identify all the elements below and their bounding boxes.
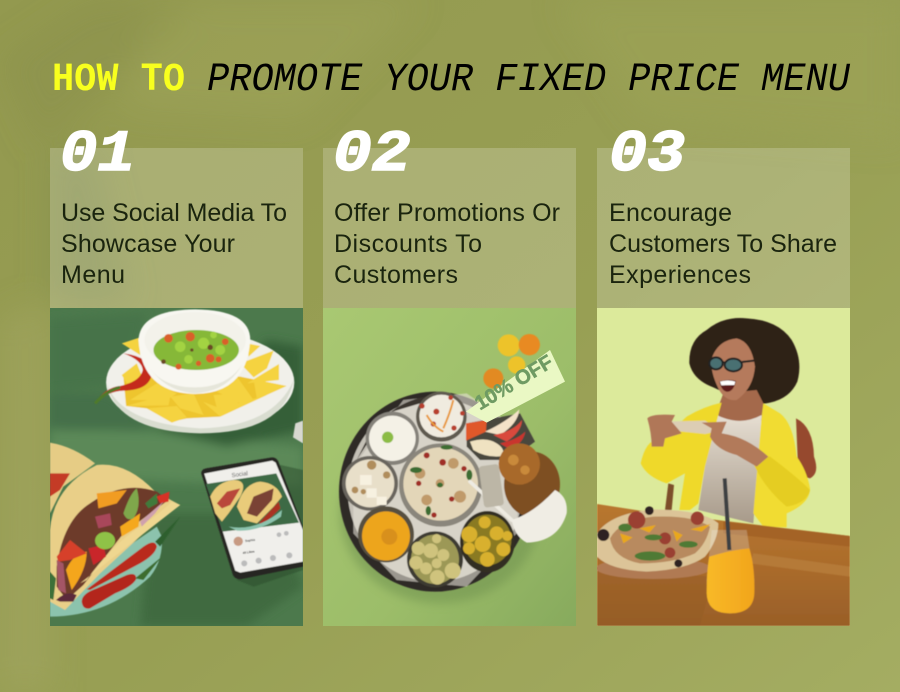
panel: step 3 — [596, 122, 850, 626]
photo: woman photographing pizza — [597, 308, 850, 626]
napkin — [293, 421, 303, 443]
photo: tacos, chips and phone on green table — [50, 308, 303, 626]
panel: step 2 — [323, 122, 576, 626]
bowl — [138, 309, 250, 394]
sago bowl — [416, 392, 467, 442]
glasses — [709, 357, 742, 371]
teal plate — [50, 527, 162, 617]
title: HOW TO PROMOTE YOUR FIXED PRICE MENU — [52, 57, 851, 102]
front taco — [50, 465, 180, 610]
hands — [647, 415, 682, 447]
shirt — [698, 415, 762, 523]
table — [597, 504, 850, 626]
hair — [689, 318, 799, 404]
photo: tacos, chips and phone on green table: 45 Likes — [243, 549, 255, 555]
steel thali — [339, 392, 531, 592]
halwa bowl — [358, 506, 414, 562]
back taco — [50, 443, 95, 513]
red peppers — [87, 542, 157, 590]
sweet — [479, 464, 504, 508]
marigold flowers — [498, 334, 520, 356]
fruit bowl — [467, 413, 535, 460]
phone — [663, 421, 722, 434]
jackfruit bowl — [460, 511, 515, 572]
text: use social media: Menu — [61, 261, 125, 289]
straw — [725, 478, 729, 550]
phone — [237, 465, 303, 587]
chili — [95, 353, 152, 403]
face — [711, 338, 755, 400]
neck and chest — [718, 390, 765, 425]
pizza — [596, 558, 711, 579]
discount tag: 10% OFF — [471, 351, 557, 415]
text: use social media: Showcase Your — [61, 230, 235, 258]
card background 3 — [597, 148, 850, 308]
papad — [512, 490, 567, 543]
potato bowl — [407, 531, 463, 587]
photo: tacos, chips and phone on green table: Sophia — [245, 538, 256, 543]
photo: thali plate with discount tag — [323, 308, 576, 626]
text: offer promotions: Offer Promotions Or — [334, 199, 560, 227]
rice bowl — [399, 443, 482, 527]
number 02: 02 — [333, 122, 411, 188]
paneer bowl — [342, 456, 398, 511]
taco filling — [97, 490, 127, 508]
text: offer promotions: Discounts To — [334, 230, 482, 258]
text: use social media: Use Social Media To — [61, 199, 287, 227]
text: encourage customers: Encourage — [609, 199, 732, 227]
plate and chips — [106, 332, 294, 433]
number 01: 01 — [60, 123, 135, 188]
panel: step 1 — [50, 123, 303, 626]
card background 2 — [323, 148, 576, 308]
text: encourage customers: Customers To Share — [609, 230, 837, 258]
text: offer promotions: Customers — [334, 261, 458, 289]
card background 1 — [50, 148, 303, 308]
phone interface text: Social — [231, 471, 248, 479]
juice glass — [707, 530, 754, 613]
number 03: 03 — [609, 122, 685, 188]
cardigan — [641, 403, 722, 510]
spoon — [470, 482, 512, 520]
chair — [796, 418, 816, 478]
curd bowl — [366, 412, 419, 465]
text: encourage customers: Experiences — [609, 261, 751, 289]
vada and puri — [504, 452, 560, 517]
